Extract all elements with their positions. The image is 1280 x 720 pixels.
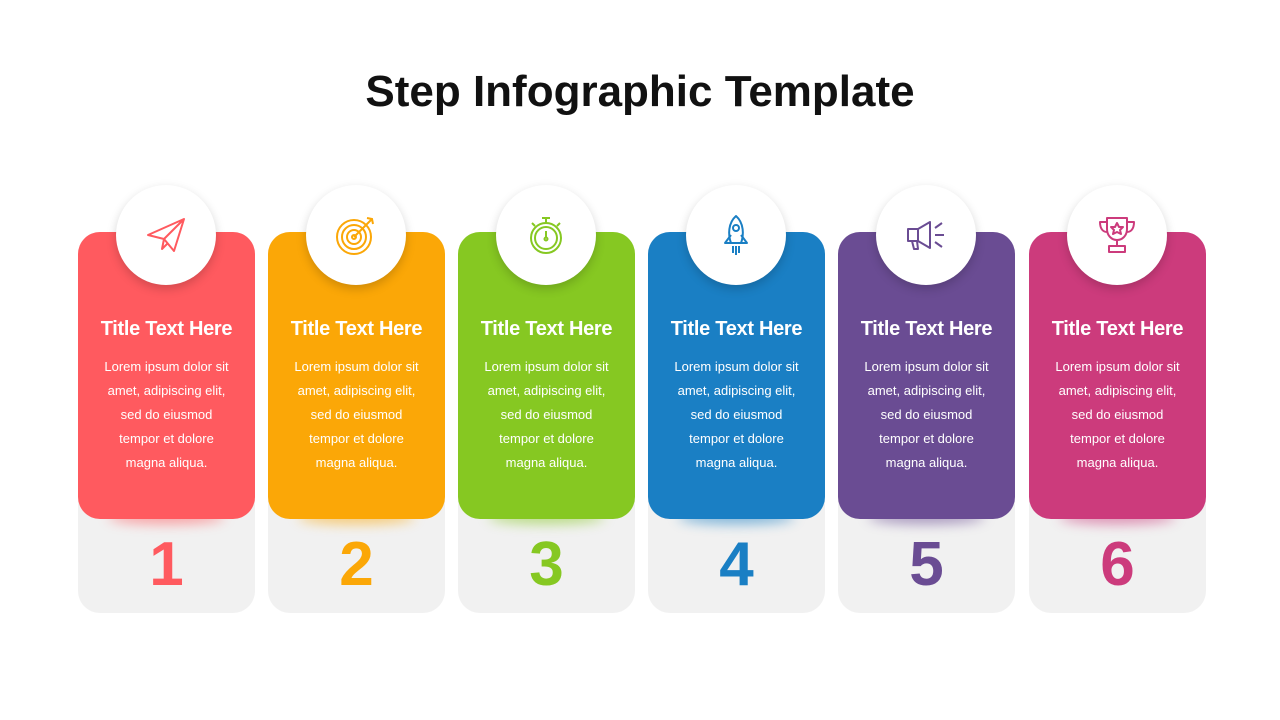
step 4 (648, 187, 825, 613)
icon: stopwatch (496, 185, 596, 285)
heading: Title Text Here (1052, 318, 1183, 340)
number: 2 (339, 530, 374, 599)
heading: Title Text Here (291, 318, 422, 340)
text: magna aliqua. (696, 455, 777, 470)
text: Lorem ipsum dolor sit (1055, 359, 1180, 374)
text: magna aliqua. (316, 455, 397, 470)
icon: rocket (686, 185, 786, 285)
text: Lorem ipsum dolor sit (864, 359, 989, 374)
heading: Title Text Here (481, 318, 612, 340)
number: 1 (149, 530, 184, 599)
text (1055, 359, 1180, 470)
text: amet, adipiscing elit, (868, 383, 985, 398)
text: sed do eiusmod (881, 407, 972, 422)
icon: paper plane (116, 185, 216, 285)
step 5 (838, 187, 1015, 613)
text: amet, adipiscing elit, (488, 383, 605, 398)
number: 6 (1100, 530, 1135, 599)
step 3 (458, 187, 635, 613)
text: magna aliqua. (886, 455, 967, 470)
text: sed do eiusmod (311, 407, 402, 422)
number: 5 (909, 530, 944, 599)
text: magna aliqua. (1077, 455, 1158, 470)
text: magna aliqua. (506, 455, 587, 470)
heading: Title Text Here (101, 318, 232, 340)
text: Lorem ipsum dolor sit (484, 359, 609, 374)
text: tempor et dolore (689, 431, 784, 446)
text: Lorem ipsum dolor sit (674, 359, 799, 374)
step 1 (78, 187, 255, 613)
text: sed do eiusmod (501, 407, 592, 422)
number: 3 (529, 530, 564, 599)
heading: Title Text Here (671, 318, 802, 340)
text: tempor et dolore (499, 431, 594, 446)
text: amet, adipiscing elit, (298, 383, 415, 398)
text: tempor et dolore (1070, 431, 1165, 446)
icon: target (306, 185, 406, 285)
text (104, 359, 229, 470)
step 2 (268, 187, 445, 613)
text (484, 359, 609, 470)
text: Lorem ipsum dolor sit (104, 359, 229, 374)
text: sed do eiusmod (121, 407, 212, 422)
title: Step Infographic Template (365, 67, 915, 116)
number: 4 (719, 530, 754, 599)
text: tempor et dolore (309, 431, 404, 446)
text: tempor et dolore (879, 431, 974, 446)
icon: trophy (1067, 185, 1167, 285)
icon: megaphone (876, 185, 976, 285)
heading: Title Text Here (861, 318, 992, 340)
step 6 (1029, 187, 1206, 613)
text: amet, adipiscing elit, (108, 383, 225, 398)
text: sed do eiusmod (691, 407, 782, 422)
text: amet, adipiscing elit, (1059, 383, 1176, 398)
text (294, 359, 419, 470)
text: sed do eiusmod (1072, 407, 1163, 422)
text: amet, adipiscing elit, (678, 383, 795, 398)
text: Lorem ipsum dolor sit (294, 359, 419, 374)
text (674, 359, 799, 470)
text: magna aliqua. (126, 455, 207, 470)
text (864, 359, 989, 470)
text: tempor et dolore (119, 431, 214, 446)
